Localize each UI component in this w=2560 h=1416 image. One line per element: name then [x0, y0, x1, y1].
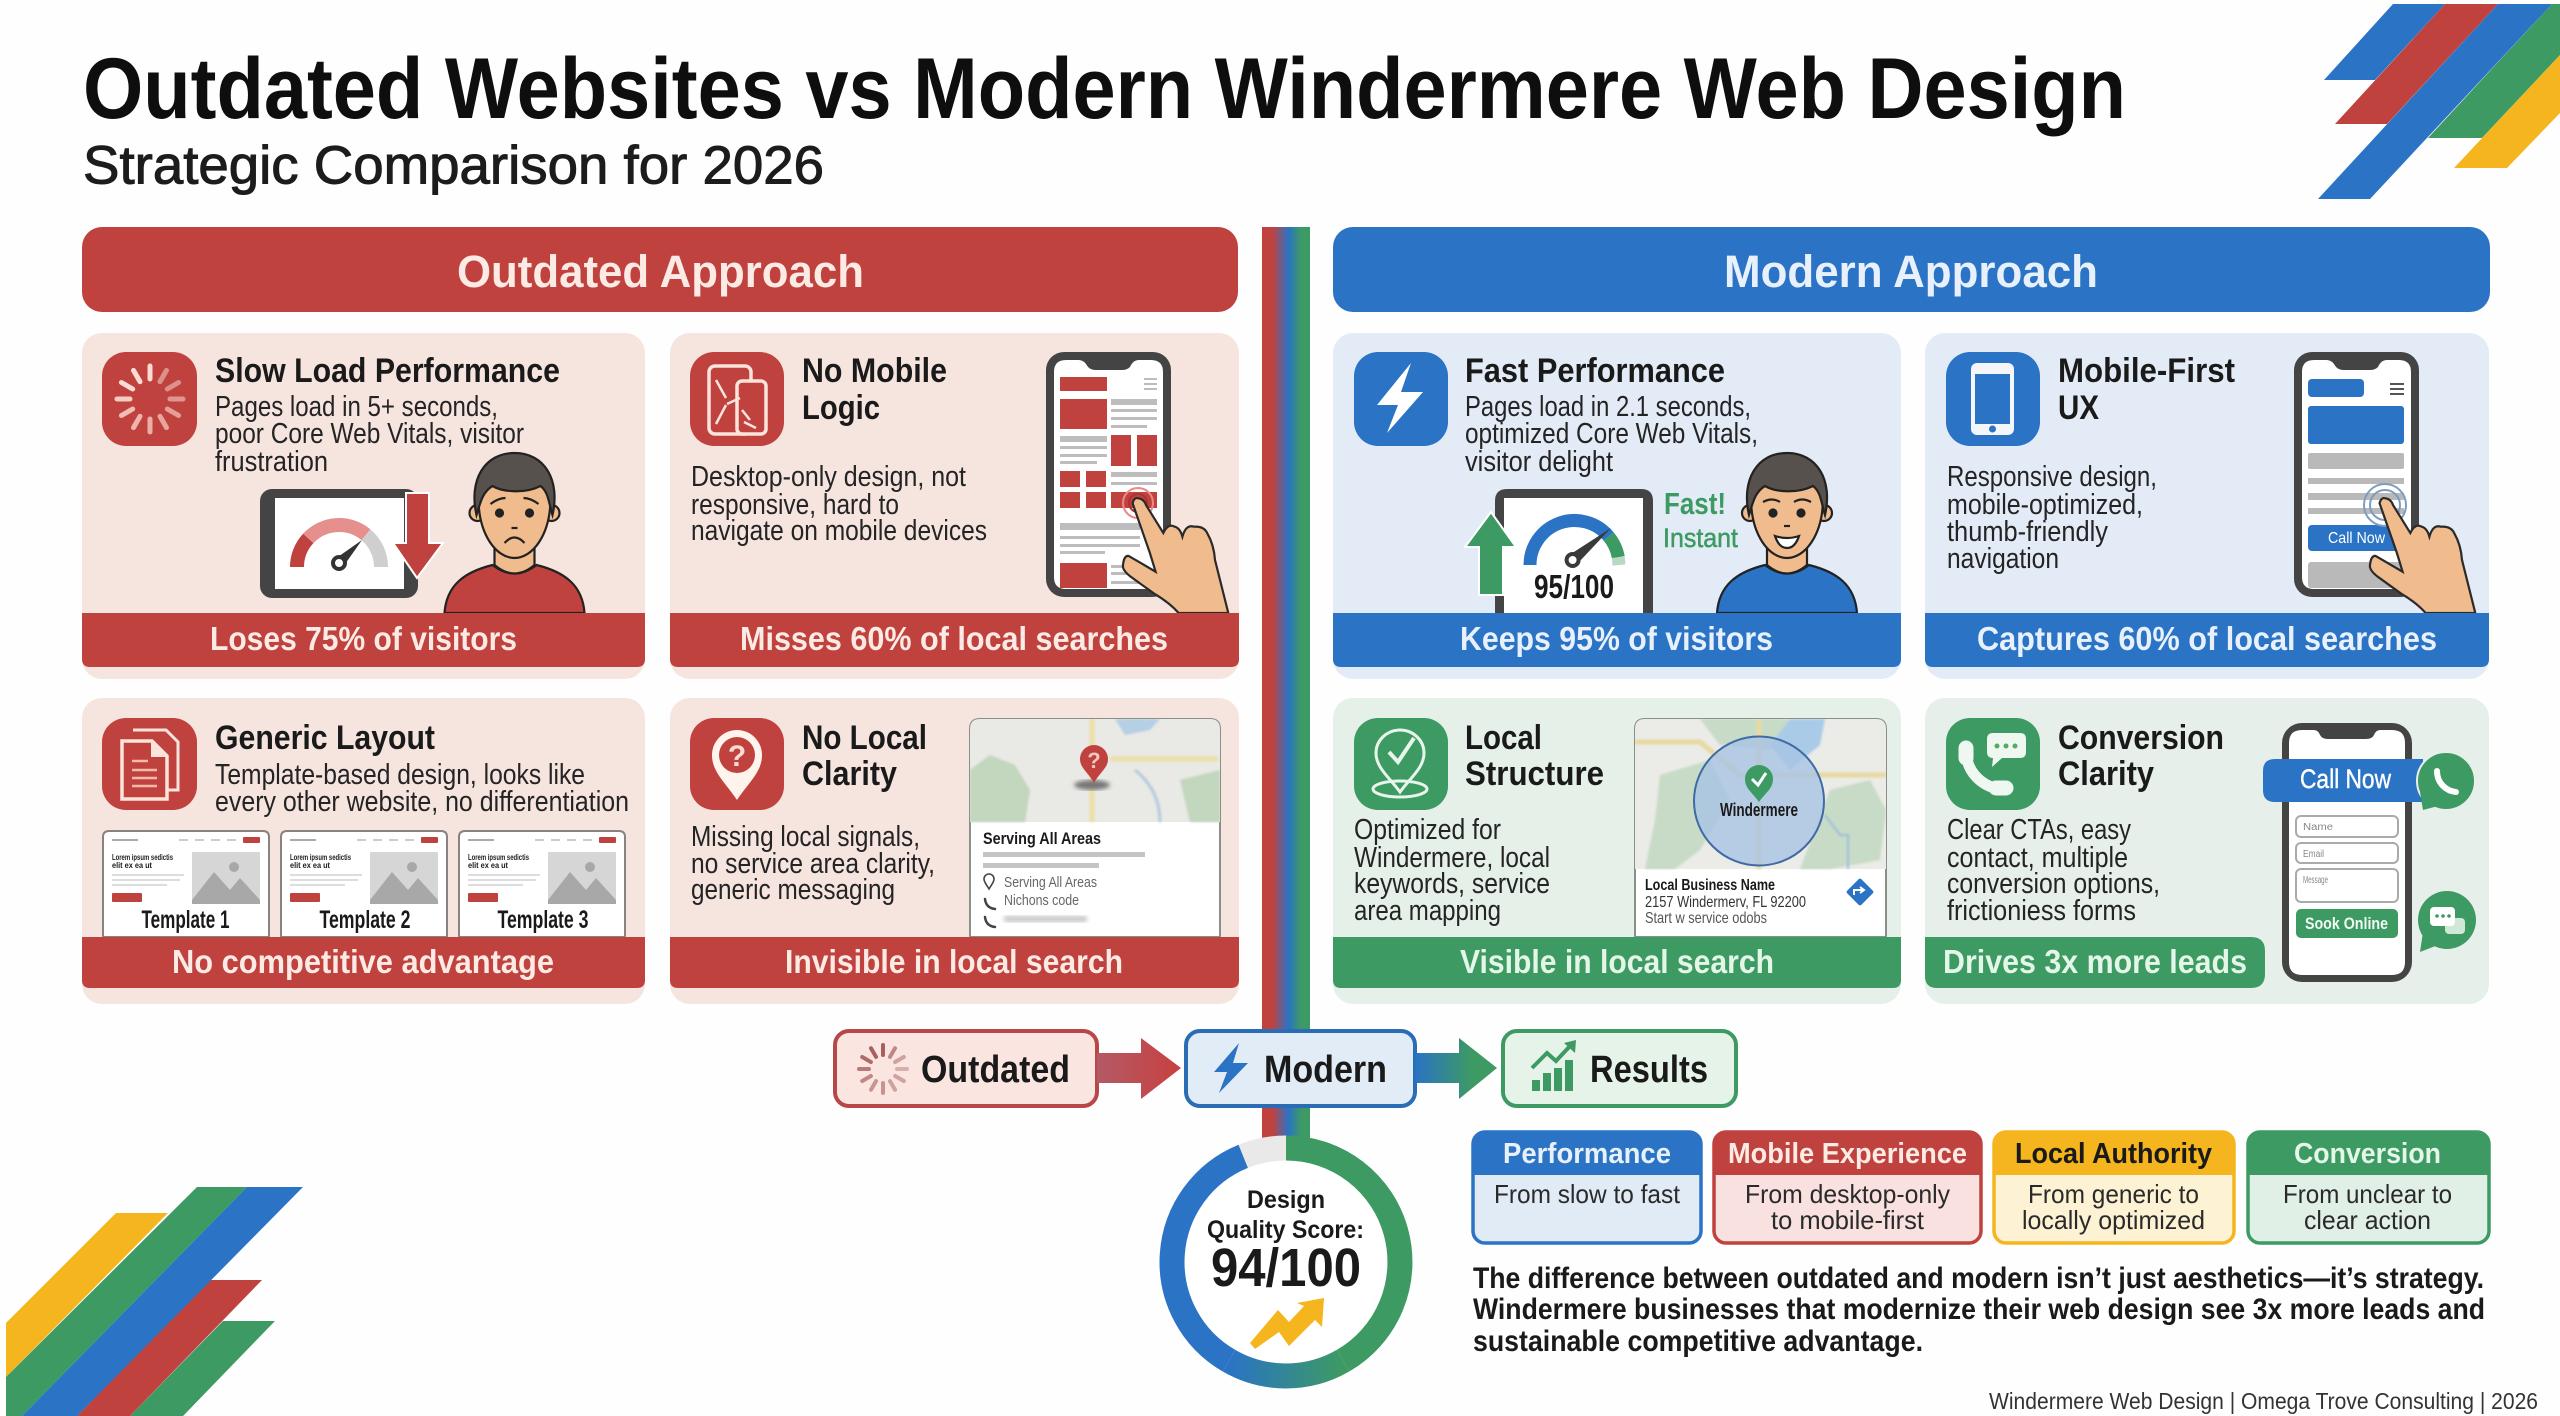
card title: Fast Performance: [1465, 352, 1725, 390]
heading: outdated approach: [82, 227, 1238, 312]
outcome banner: [1333, 937, 1901, 988]
outcome banner: [1925, 613, 2489, 667]
card title: [802, 719, 927, 793]
title: Outdated Websites vs Modern Windermere Web Design: [83, 41, 2126, 137]
illustration: vague map listing: Serving All Areas: [1004, 874, 1097, 891]
template thumbnail 1: [103, 831, 269, 937]
design quality score dial: [1172, 1148, 1400, 1376]
illustration: phone contact form: Sook Online: [2305, 914, 2388, 933]
card description: area mapping: [1354, 895, 1501, 927]
illustration: vague map listing: Nichons code: [1004, 892, 1079, 909]
card title: No Local: [802, 719, 927, 757]
dial label: [1207, 1186, 1364, 1244]
illustration: tablet with low speed gauge: [260, 489, 443, 598]
card description: Windermere, local: [1354, 842, 1550, 874]
icon: green call bubble: [2417, 752, 2475, 810]
template thumbnail 3: Lorem ipsum sedictis: [468, 853, 529, 862]
dial label: Design: [1247, 1186, 1325, 1214]
template thumbnail 2: Lorem ipsum sedictis: [290, 853, 351, 862]
stat card: local authority: locally optimized: [2022, 1205, 2205, 1235]
card description: Pages load in 2.1 seconds,: [1465, 391, 1751, 423]
label: fast instant: [1663, 486, 1738, 553]
card title: UX: [2058, 389, 2099, 427]
stat card: conversion: Conversion: [2294, 1138, 2441, 1170]
card title: Mobile-First: [2058, 352, 2235, 390]
outcome banner: [82, 937, 645, 988]
card description: Responsive design,: [1947, 461, 2157, 493]
outcome banner: [1333, 613, 1901, 667]
panel: generic layout: [82, 698, 645, 1004]
illustration: windermere service area map: Windermere: [1720, 800, 1798, 820]
illustration: tablet with high speed gauge: 95/100: [1534, 568, 1614, 605]
icon: lightning bolt: [1214, 1043, 1248, 1093]
outcome banner: Drives 3x more leads: [1943, 943, 2247, 980]
template thumbnail 3: [459, 831, 625, 937]
card title: [2058, 719, 2224, 793]
stat card: local authority: From generic to: [2028, 1179, 2199, 1209]
card description: Pages load in 5+ seconds,: [215, 391, 498, 423]
card description: visitor delight: [1465, 446, 1613, 478]
stat card: performance: From slow to fast: [1494, 1179, 1681, 1209]
card title: Local: [1465, 719, 1542, 757]
card title: Structure: [1465, 755, 1604, 793]
template thumbnail 2: [281, 831, 447, 937]
logo: bottom left stripes: [6, 1187, 303, 1416]
card description: thumb-friendly: [1947, 516, 2108, 548]
stat card: local authority: [1994, 1132, 2234, 1243]
outcome banner: Keeps 95% of visitors: [1460, 620, 1773, 657]
icon: broken phones: [690, 352, 784, 446]
card title: No Mobile: [802, 352, 947, 390]
illustration: windermere service area map: [1635, 719, 1886, 937]
outcome banner: [1925, 937, 2265, 988]
template thumbnail 2: Template 2: [320, 906, 410, 934]
panel: conversion clarity: [1925, 698, 2489, 1004]
icon: question pin: ?: [728, 740, 746, 773]
card description: [215, 759, 629, 818]
card description: conversion options,: [1947, 868, 2160, 900]
card description: Missing local signals,: [691, 821, 920, 853]
panel: slow load performance: [82, 333, 645, 679]
card description: [691, 461, 987, 547]
heading: outdated approach: Outdated Approach: [457, 246, 864, 297]
card title: Clarity: [802, 755, 897, 793]
dial value: 94/100: [1211, 1238, 1361, 1298]
icon: gold trend arrow: [1250, 1298, 1324, 1349]
label: fast instant: Fast!: [1664, 486, 1726, 521]
card description: Desktop-only design, not: [691, 461, 966, 493]
outcome banner: [670, 937, 1239, 988]
card title: Generic Layout: [215, 719, 435, 757]
card description: [691, 821, 935, 906]
outcome banner: [670, 613, 1239, 667]
card description: [1947, 814, 2160, 927]
outcome banner: Captures 60% of local searches: [1977, 620, 2437, 657]
card description: responsive, hard to: [691, 489, 899, 521]
panel: local structure: [1333, 698, 1901, 1004]
card description: keywords, service: [1354, 868, 1550, 900]
illustration: frustrated person: [444, 453, 584, 613]
flow step: modern: Modern: [1264, 1049, 1387, 1091]
flow step: results: [1503, 1031, 1736, 1106]
illustration: vague map listing: ?: [1087, 748, 1101, 773]
template thumbnail 1: Template 1: [142, 906, 230, 934]
arrow: modern to results: [1415, 1038, 1497, 1099]
illustration: pointing hand: [2370, 498, 2475, 613]
closing statement: [1473, 1262, 2485, 1358]
stat card: mobile experience: From desktop-only: [1745, 1179, 1950, 1209]
flow step: outdated: [835, 1031, 1097, 1106]
heading: modern approach: [1333, 227, 2490, 312]
dial label: Quality Score:: [1207, 1216, 1364, 1244]
card title: Logic: [802, 389, 880, 427]
stat card: mobile experience: to mobile-first: [1771, 1205, 1925, 1235]
illustration: phone contact form: Name: [2303, 822, 2333, 833]
icon: growth chart: [1532, 1040, 1576, 1091]
card description: [215, 391, 524, 478]
card description: [1354, 814, 1550, 927]
outcome banner: Misses 60% of local searches: [740, 620, 1168, 657]
arrow: outdated to modern: [1097, 1038, 1181, 1099]
stat card: conversion: clear action: [2304, 1205, 2431, 1235]
card description: Optimized for: [1354, 814, 1501, 846]
illustration: happy person: [1717, 453, 1857, 613]
illustration: phone with mobile layout: [2294, 352, 2419, 597]
card description: generic messaging: [691, 874, 895, 906]
stat card: performance: [1473, 1132, 1701, 1243]
icon: spinner: [859, 1045, 907, 1093]
button label: Call Now: [2328, 530, 2385, 547]
illustration: phone contact form: Message: [2303, 875, 2328, 886]
card description: navigation: [1947, 543, 2059, 575]
card description: Clear CTAs, easy: [1947, 814, 2131, 846]
flow step: outdated: Outdated: [921, 1049, 1070, 1091]
call now callout: Call Now: [2300, 764, 2391, 794]
outcome banner: [82, 613, 645, 667]
stat card: performance: Performance: [1503, 1138, 1671, 1170]
stat card: local authority: Local Authority: [2015, 1138, 2212, 1170]
outcome banner: Visible in local search: [1460, 943, 1774, 980]
icon: green chat bubble: [2418, 891, 2476, 952]
illustration: windermere service area map: Local Business Name: [1645, 877, 1775, 894]
icon: documents: [102, 718, 197, 810]
card description: contact, multiple: [1947, 842, 2128, 874]
illustration: phone with desktop layout: [1046, 352, 1171, 597]
illustration: vague map listing: Serving All Areas: [983, 829, 1101, 848]
stat card: mobile experience: Mobile Experience: [1728, 1138, 1967, 1170]
card description: [1465, 391, 1758, 478]
card title: Conversion: [2058, 719, 2224, 757]
illustration: phone contact form: [2282, 723, 2412, 982]
illustration: pointing hand: [1123, 498, 1228, 613]
heading: modern approach: Modern Approach: [1724, 246, 2098, 297]
panel: no local clarity: [670, 698, 1239, 1004]
call now callout: [2263, 759, 2423, 802]
icon: lightning bolt: [1354, 352, 1448, 446]
icon: check pin: [1354, 718, 1448, 810]
flow step: modern: [1186, 1031, 1415, 1106]
template thumbnail 3: Template 3: [498, 906, 588, 934]
panel: no mobile logic: [670, 333, 1239, 679]
card title: [1465, 719, 1604, 793]
illustration: windermere service area map: Start w service odobs: [1645, 910, 1767, 927]
card description: every other website, no differentiation: [215, 786, 629, 818]
card title: Slow Load Performance: [215, 352, 560, 390]
card description: frictioniess forms: [1947, 895, 2136, 927]
illustration: tablet with high speed gauge: [1465, 489, 1653, 620]
card title: [802, 352, 947, 427]
outcome banner: Invisible in local search: [785, 943, 1123, 980]
card description: optimized Core Web Vitals,: [1465, 418, 1758, 450]
template thumbnail 2: elit ex ea ut: [290, 861, 330, 870]
template thumbnail 1: elit ex ea ut: [112, 861, 152, 870]
card description: mobile-optimized,: [1947, 489, 2143, 521]
illustration: windermere service area map: 2157 Windermerv, FL 92200: [1645, 894, 1806, 911]
illustration: vague map listing: [970, 719, 1220, 937]
icon: loading spinner: [102, 352, 197, 446]
card description: no service area clarity,: [691, 848, 935, 880]
closing statement: sustainable competitive advantage.: [1473, 1325, 1923, 1358]
stat card: conversion: [2248, 1132, 2489, 1243]
outcome banner: Loses 75% of visitors: [210, 620, 517, 657]
flow step: results: Results: [1590, 1049, 1708, 1091]
card description: [1947, 461, 2157, 575]
stat card: conversion: From unclear to: [2283, 1179, 2452, 1209]
outcome banner: No competitive advantage: [172, 943, 554, 980]
card description: frustration: [215, 446, 328, 478]
panel: fast performance: [1333, 333, 1901, 679]
icon: phone and chat: [1946, 718, 2040, 810]
illustration: phone contact form: Email: [2303, 849, 2324, 860]
template thumbnail 1: Lorem ipsum sedictis: [112, 853, 173, 862]
icon: phone: [1946, 352, 2040, 446]
center divider strip: [1262, 227, 1310, 1152]
template thumbnail 3: elit ex ea ut: [468, 861, 508, 870]
stat card: mobile experience: [1714, 1132, 1981, 1243]
subtitle: Strategic Comparison for 2026: [83, 136, 824, 196]
card description: Template-based design, looks like: [215, 759, 585, 791]
panel: mobile-first ux: [1925, 333, 2489, 679]
card description: navigate on mobile devices: [691, 515, 987, 547]
icon: question pin: [690, 718, 784, 810]
logo: top right stripes: [2318, 4, 2560, 199]
card description: poor Core Web Vitals, visitor: [215, 418, 524, 450]
label: fast instant: Instant: [1663, 523, 1738, 553]
card title: Clarity: [2058, 755, 2154, 793]
card title: [2058, 352, 2235, 427]
